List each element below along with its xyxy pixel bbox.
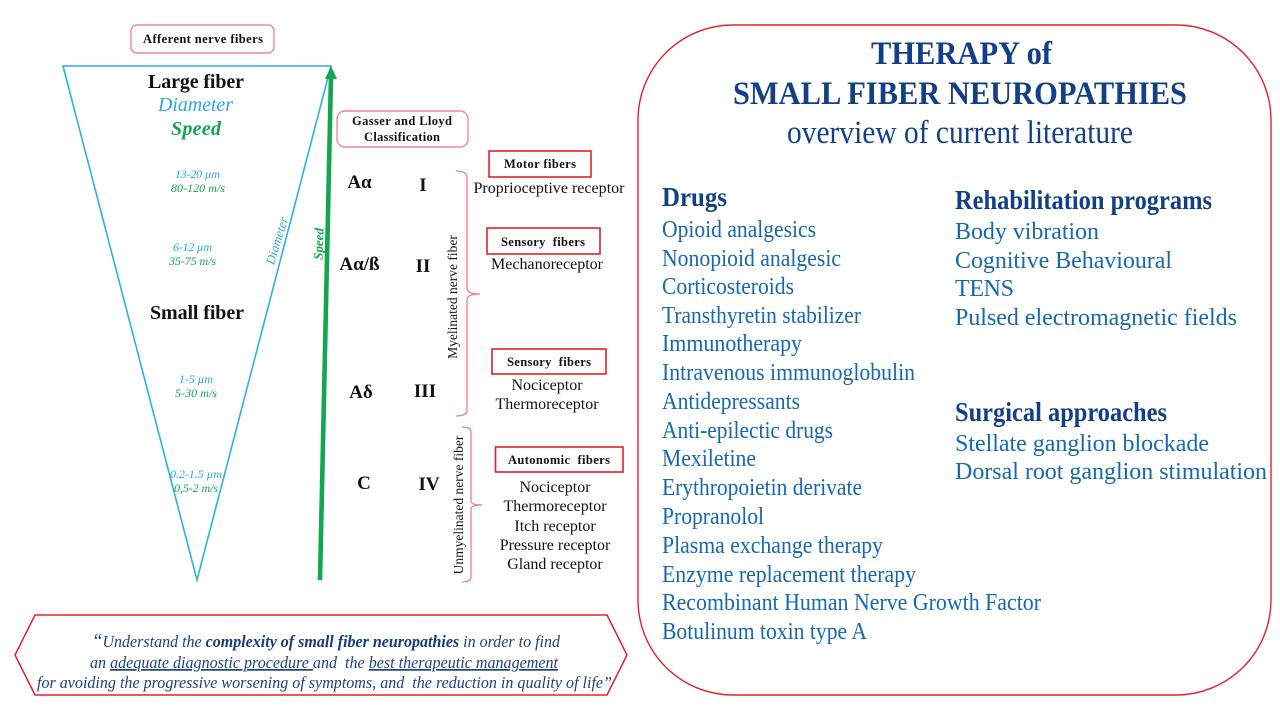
group: sensory fibers, nociceptor and thermoreceptor — [492, 349, 606, 413]
callout: quote: “Understand the complexity of small fiber neuropathies in order to find — [92, 630, 560, 652]
group: autonomic fibers and receptors: Nociceptor — [519, 479, 591, 496]
classification row: A alpha, I: I — [419, 175, 427, 196]
values: 13-20 um, 80-120 m/s: 80-120 m/s — [171, 181, 225, 195]
label: diameter: Diameter — [157, 94, 233, 116]
title: THERAPY of — [871, 36, 1053, 72]
group: autonomic fibers and receptors — [496, 447, 623, 573]
classification row: C, IV: IV — [418, 474, 440, 495]
brace: unmyelinated nerve fiber — [451, 427, 482, 582]
values: 1-5 um, 5-30 m/s — [175, 372, 217, 400]
group: sensory fibers, mechanoreceptor — [487, 228, 604, 273]
list: surgical approaches — [955, 397, 1267, 485]
group: motor fibers: Proprioceptive receptor — [474, 180, 625, 197]
arrow: speed: Speed — [310, 227, 327, 260]
arrow: speed — [310, 66, 337, 580]
list: drugs: Immunotherapy — [662, 331, 802, 357]
list: rehabilitation programs: Body vibration — [955, 219, 1099, 245]
triangle outline — [63, 66, 331, 580]
group: sensory fibers, mechanoreceptor: Mechanoreceptor — [491, 256, 604, 273]
group: autonomic fibers and receptors: Gland receptor — [507, 556, 603, 573]
label: speed: Speed — [171, 118, 222, 140]
list: rehabilitation programs — [955, 185, 1237, 331]
group: autonomic fibers and receptors: Autonomic fibers — [508, 453, 610, 467]
group: sensory fibers, mechanoreceptor: Sensory fibers — [501, 235, 585, 249]
label: afferent nerve fibers — [131, 25, 274, 53]
list: rehabilitation programs: Cognitive Behavioural — [955, 248, 1172, 274]
group: sensory fibers, nociceptor and thermoreceptor: Nociceptor — [511, 377, 583, 394]
list: drugs: Transthyretin stabilizer — [662, 303, 861, 329]
group: sensory fibers, nociceptor and thermoreceptor: Thermoreceptor — [495, 396, 599, 413]
classification row: A alpha/beta, II — [339, 254, 430, 277]
classification row: A delta, III: III — [414, 381, 436, 402]
values: 0.2-1.5 um, 0,5-2 m/s: 0,5-2 m/s — [174, 481, 218, 495]
list: drugs: Erythropoietin derivate — [662, 475, 862, 501]
list: surgical approaches: Dorsal root ganglion stimulation — [955, 459, 1267, 485]
label: Gasser and Lloyd classification: Classification — [364, 130, 440, 144]
brace: unmyelinated nerve fiber: Unmyelinated nerve fiber — [451, 435, 466, 574]
panel: therapy — [638, 25, 1271, 695]
list: drugs: Corticosteroids — [662, 274, 794, 300]
list: drugs: Drugs — [662, 182, 727, 212]
list: surgical approaches: Stellate ganglion blockade — [955, 431, 1209, 457]
title — [733, 36, 1187, 151]
values: 6-12 um, 35-75 m/s: 6-12 µm — [173, 240, 212, 254]
callout: quote: an adequate diagnostic procedure and the best therapeutic management — [90, 653, 559, 672]
label: afferent nerve fibers: Afferent nerve fibers — [143, 32, 263, 46]
title: SMALL FIBER NEUROPATHIES — [733, 76, 1187, 112]
values: 1-5 um, 5-30 m/s: 1-5 µm — [179, 372, 213, 386]
classification row: A delta, III — [349, 381, 436, 403]
list: drugs: Plasma exchange therapy — [662, 533, 883, 559]
list: drugs: Mexiletine — [662, 446, 756, 472]
group: autonomic fibers and receptors: Pressure receptor — [500, 537, 611, 554]
values: 13-20 um, 80-120 m/s — [171, 167, 225, 195]
heading: small fiber: Small fiber — [150, 302, 244, 324]
list: drugs: Opioid analgesics — [662, 217, 816, 243]
title: overview of current literature — [787, 115, 1133, 151]
classification row: A alpha, I — [347, 172, 427, 196]
values: 0.2-1.5 um, 0,5-2 m/s: 0.2-1.5 µm — [170, 467, 222, 481]
classification row: C, IV: C — [357, 473, 371, 494]
group: autonomic fibers and receptors: Itch receptor — [514, 518, 596, 535]
values: 13-20 um, 80-120 m/s: 13-20 µm — [175, 167, 220, 181]
classification row: A alpha/beta, II: Aα/ß — [339, 254, 380, 275]
group: motor fibers: Motor fibers — [504, 157, 576, 171]
values: 6-12 um, 35-75 m/s — [168, 240, 216, 268]
classification row: C, IV — [357, 473, 440, 495]
values: 6-12 um, 35-75 m/s: 35-75 m/s — [168, 254, 216, 268]
brace: myelinated nerve fiber: Myelinated nerve fiber — [445, 235, 460, 359]
list: rehabilitation programs: Pulsed electromagnetic fields — [955, 305, 1237, 331]
group: autonomic fibers and receptors: Thermoreceptor — [503, 498, 607, 515]
list: rehabilitation programs: TENS — [955, 276, 1014, 302]
list: drugs: Botulinum toxin type A — [662, 619, 868, 645]
label: Gasser and Lloyd classification — [337, 111, 468, 147]
list: drugs: Nonopioid analgesic — [662, 246, 841, 272]
heading: large fiber: Large fiber — [148, 71, 244, 93]
list: drugs — [662, 182, 1041, 645]
list: drugs: Enzyme replacement therapy — [662, 562, 916, 588]
funnel diagram: fiber diameter and speed — [63, 66, 331, 580]
callout: quote — [15, 615, 627, 695]
list: drugs: Intravenous immunoglobulin — [662, 360, 915, 386]
values: 1-5 um, 5-30 m/s: 5-30 m/s — [175, 386, 217, 400]
list: drugs: Anti-epilectic drugs — [662, 418, 833, 444]
group: sensory fibers, nociceptor and thermoreceptor: Sensory fibers — [507, 355, 591, 369]
list: drugs: Antidepressants — [662, 389, 800, 415]
rotated label: diameter: Diameter — [262, 214, 291, 267]
brace: myelinated nerve fiber — [445, 171, 480, 416]
list: rehabilitation programs: Rehabilitation programs — [955, 185, 1212, 215]
callout: quote: for avoiding the progressive worsening of symptoms, and the reduction in quality of life” — [37, 673, 612, 692]
list: drugs: Recombinant Human Nerve Growth Factor — [662, 590, 1041, 616]
label: Gasser and Lloyd classification: Gasser and Lloyd — [352, 114, 452, 128]
classification row: A delta, III: Aδ — [349, 382, 373, 403]
list: drugs: Propranolol — [662, 504, 764, 530]
values: 0.2-1.5 um, 0,5-2 m/s — [170, 467, 222, 495]
group: motor fibers — [474, 151, 625, 197]
list: surgical approaches: Surgical approaches — [955, 397, 1167, 427]
classification row: A alpha, I: Aα — [347, 172, 372, 193]
classification row: A alpha/beta, II: II — [416, 256, 430, 277]
